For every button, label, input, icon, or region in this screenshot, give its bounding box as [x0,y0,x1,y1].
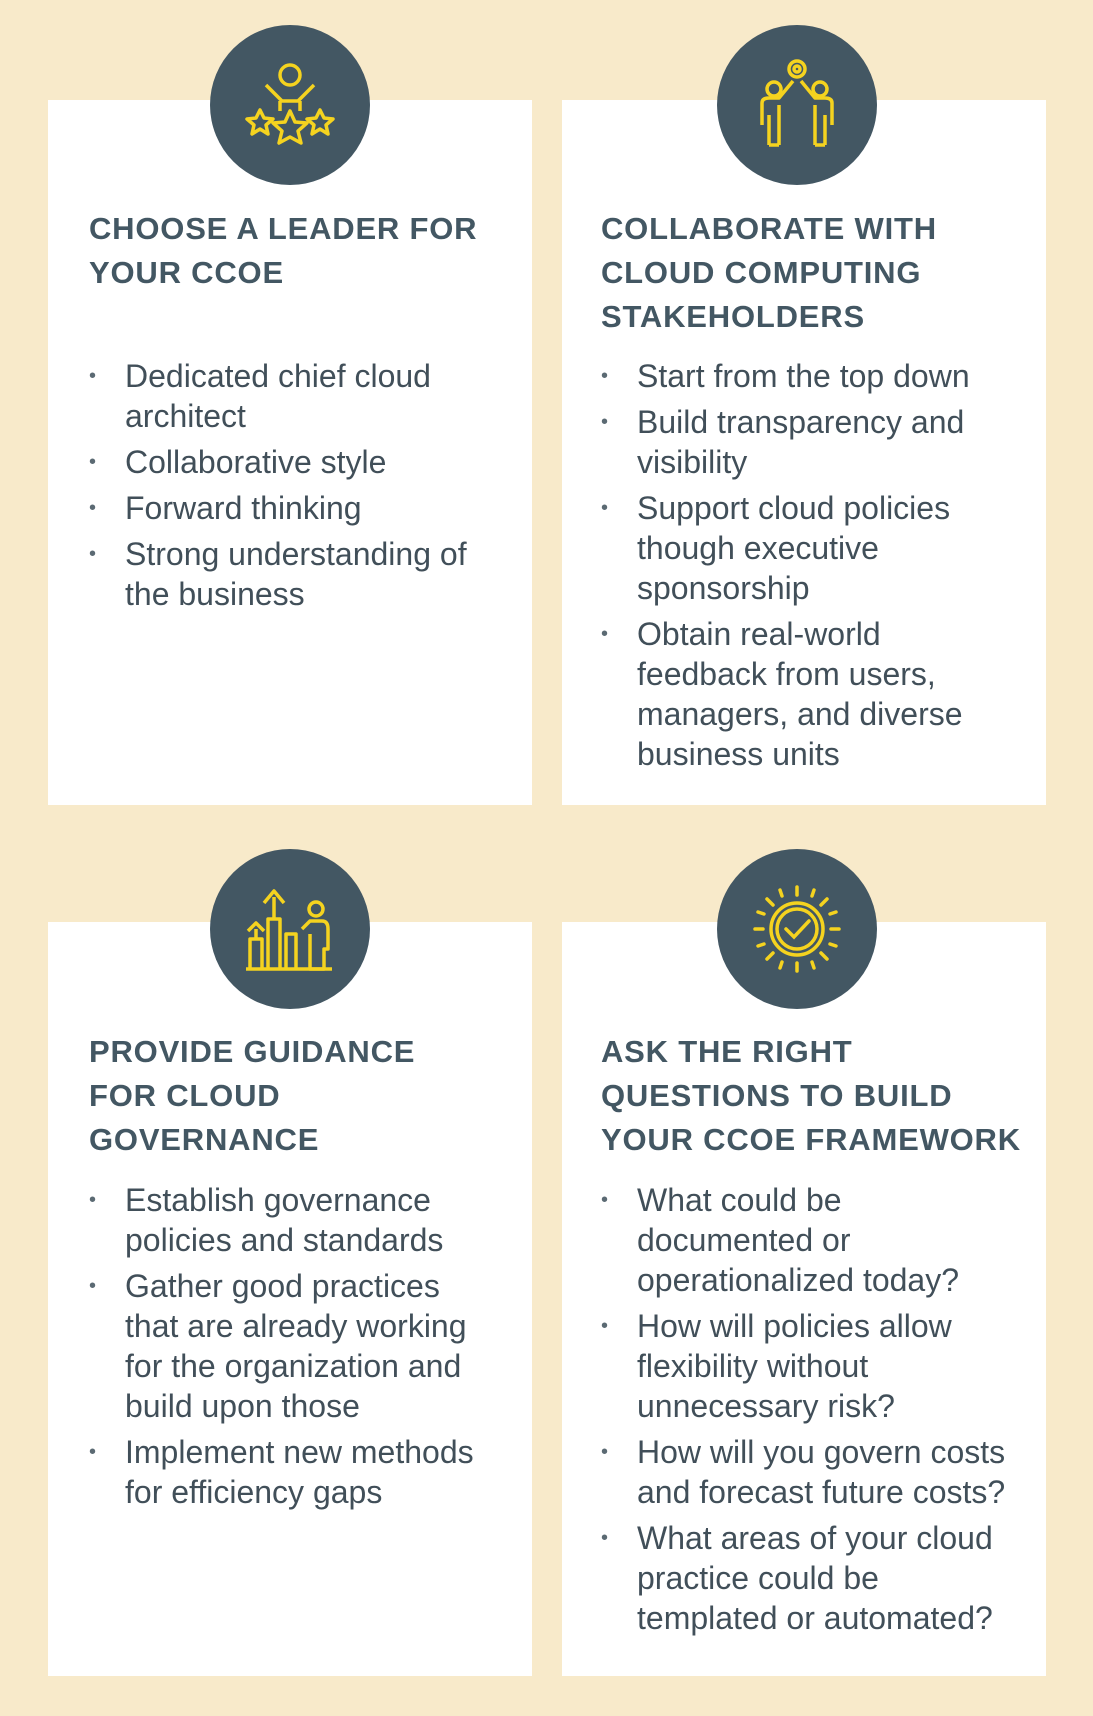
list: leader bullets [90,358,467,612]
list: leader bullets: Dedicated chief cloud architect [125,358,431,434]
heading: guidance: PROVIDE GUIDANCE [89,1034,415,1069]
heading: questions: YOUR CCOE FRAMEWORK [601,1122,1021,1157]
list: leader bullets: Strong understanding of the business [125,536,467,612]
list: guidance bullets: Implement new methods for efficiency gaps [125,1434,474,1510]
panel: guidance [48,922,532,1676]
list: leader bullets: Collaborative style [125,444,386,480]
heading: collaborate: COLLABORATE WITH [601,211,937,246]
list: collaborate bullets: Obtain real-world feedback from users, managers, and diverse business units [637,616,963,772]
heading: collaborate: STAKEHOLDERS [601,299,865,334]
list: leader bullets: Forward thinking [125,490,362,526]
icon: check badge [717,849,877,1009]
icon: leader with stars [210,25,370,185]
heading: choose a leader: YOUR CCOE [89,255,284,290]
heading: collaborate: CLOUD COMPUTING [601,255,921,290]
list: collaborate bullets [602,358,970,772]
list: questions bullets: What areas of your cloud practice could be templated or automated? [637,1520,993,1636]
list: guidance bullets [90,1182,474,1510]
heading: questions: QUESTIONS TO BUILD [601,1078,952,1113]
list: questions bullets [602,1182,1005,1636]
heading: choose a leader [89,211,477,290]
panel: choose a leader [48,100,532,805]
icon: growth chart with person [210,849,370,1009]
heading: questions: ASK THE RIGHT [601,1034,853,1069]
list: guidance bullets: Establish governance policies and standards [125,1182,443,1258]
panel: questions [562,922,1046,1676]
list: collaborate bullets: Support cloud policies though executive sponsorship [637,490,950,606]
list: questions bullets: How will you govern costs and forecast future costs? [637,1434,1005,1510]
heading: guidance [89,1034,415,1157]
list: questions bullets: How will policies allow flexibility without unnecessary risk? [637,1308,952,1424]
icon: collaborators with gear [717,25,877,185]
list: questions bullets: What could be documented or operationalized today? [637,1182,959,1298]
heading: choose a leader: CHOOSE A LEADER FOR [89,211,477,246]
panel: collaborate [562,100,1046,805]
heading: guidance: GOVERNANCE [89,1122,319,1157]
heading: questions [601,1034,1021,1157]
list: collaborate bullets: Start from the top down [637,358,970,394]
heading: guidance: FOR CLOUD [89,1078,280,1113]
list: guidance bullets: Gather good practices that are already working for the organization and build upon those [125,1268,467,1424]
heading: collaborate [601,211,937,334]
list: collaborate bullets: Build transparency and visibility [637,404,964,480]
